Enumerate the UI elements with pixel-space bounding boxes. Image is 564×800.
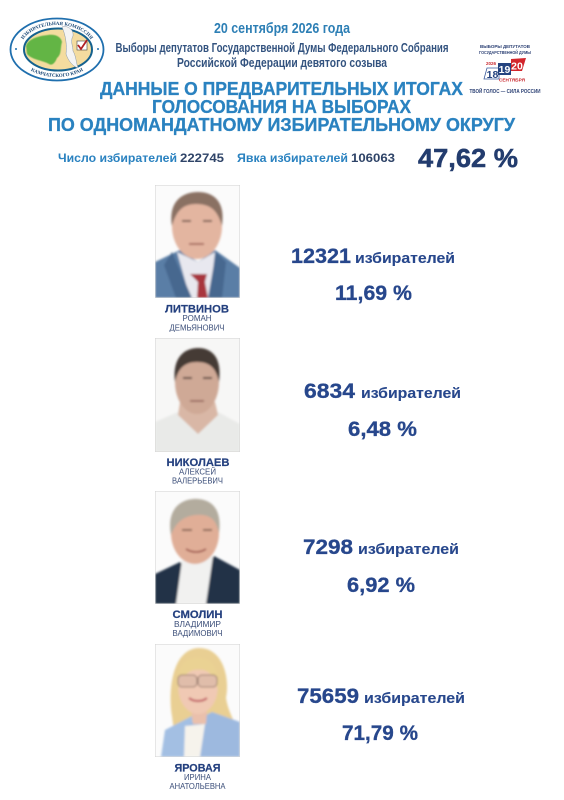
- result: Litvinov: избирателей: [355, 250, 455, 267]
- turnout statistics: [58, 143, 518, 173]
- title: [48, 79, 516, 135]
- turnout statistics: 222745: [180, 151, 224, 165]
- logo: election commission of Kamchatka: КАМЧАТСКОГО КРАЯ: [30, 68, 84, 77]
- heading: date and election name: 20 сентября 2026 года: [214, 20, 351, 37]
- result: Nikolaev: 6,48 %: [348, 418, 417, 441]
- result: Smolin: [303, 536, 459, 597]
- candidate name: Nikolaev: НИКОЛАЕВ: [166, 457, 230, 469]
- logo: elections 18-19-20 September: 2026: [486, 61, 497, 66]
- turnout statistics: 106063: [351, 151, 395, 165]
- result: Smolin: 6,92 %: [347, 574, 415, 597]
- logo: elections 18-19-20 September: 20: [511, 60, 523, 72]
- logo: elections 18-19-20 September: ТВОЙ ГОЛОС — СИЛА РОССИИ: [470, 87, 541, 95]
- result: Yarovaya: 71,79 %: [342, 722, 418, 745]
- result: Yarovaya: 75659: [297, 685, 359, 708]
- candidate name: Nikolaev: [166, 457, 230, 486]
- logo: elections 18-19-20 September: СЕНТЯБРЯ: [499, 78, 525, 82]
- turnout statistics: Число избирателей: [58, 151, 177, 165]
- heading: date and election name: Российской Федерации девятого созыва: [177, 55, 388, 70]
- result: Nikolaev: избирателей: [361, 385, 461, 402]
- candidate name: Litvinov: РОМАН: [182, 313, 212, 323]
- candidate name: Smolin: [172, 609, 223, 638]
- result: Litvinov: 11,69 %: [335, 282, 412, 305]
- candidate name: Smolin: СМОЛИН: [172, 609, 223, 621]
- logo: elections 18-19-20 September: [470, 44, 541, 95]
- turnout statistics: Явка избирателей: [237, 151, 348, 165]
- logo: election commission of Kamchatka: [10, 18, 104, 82]
- heading: date and election name: [116, 20, 448, 70]
- result: Yarovaya: избирателей: [364, 690, 465, 707]
- candidate name: Nikolaev: ВАЛЕРЬЕВИЧ: [172, 476, 223, 486]
- result: Nikolaev: 6834: [304, 380, 355, 403]
- turnout statistics: 47,62 %: [418, 143, 518, 173]
- logo: elections 18-19-20 September: 18: [487, 69, 498, 81]
- result: Litvinov: 12321: [291, 245, 351, 268]
- title: ДАННЫЕ О ПРЕДВАРИТЕЛЬНЫХ ИТОГАХ: [100, 79, 463, 99]
- title: ПО ОДНОМАНДАТНОМУ ИЗБИРАТЕЛЬНОМУ ОКРУГУ: [48, 115, 516, 135]
- logo: elections 18-19-20 September: ГОСУДАРСТВЕННОЙ ДУМЫ: [479, 48, 531, 55]
- candidate name: Litvinov: ДЕМЬЯНОВИЧ: [170, 322, 224, 332]
- logo: election commission of Kamchatka: ИЗБИРАТЕЛЬНАЯ КОМИССИЯ: [20, 22, 94, 40]
- logo: elections 18-19-20 September: 19: [499, 64, 510, 76]
- candidate photo: Nikolaev: [155, 338, 240, 452]
- candidate name: Smolin: ВЛАДИМИР: [174, 619, 221, 629]
- title: ГОЛОСОВАНИЯ НА ВЫБОРАХ: [152, 97, 411, 117]
- candidate name: Yarovaya: [170, 762, 226, 791]
- candidate name: Nikolaev: АЛЕКСЕЙ: [179, 466, 216, 476]
- result: Nikolaev: [304, 380, 461, 441]
- candidate name: Yarovaya: АНАТОЛЬЕВНА: [170, 781, 226, 791]
- candidate name: Smolin: ВАДИМОВИЧ: [172, 628, 222, 638]
- result: Yarovaya: [297, 685, 465, 745]
- result: Litvinov: [291, 245, 455, 305]
- result: Smolin: избирателей: [358, 541, 459, 558]
- result: Smolin: 7298: [303, 536, 353, 559]
- candidate photo: Litvinov: [155, 185, 240, 298]
- candidate photo: Smolin: [155, 491, 240, 604]
- candidate name: Yarovaya: ЯРОВАЯ: [174, 762, 221, 774]
- candidate name: Yarovaya: ИРИНА: [184, 772, 211, 782]
- logo: elections 18-19-20 September: ВЫБОРЫ ДЕПУТАТОВ: [480, 44, 531, 49]
- candidate name: Litvinov: ЛИТВИНОВ: [165, 304, 229, 316]
- candidate photo: Yarovaya: [155, 644, 240, 757]
- candidate name: Litvinov: [165, 304, 229, 332]
- heading: date and election name: Выборы депутатов Государственной Думы Федерального Собрания: [116, 40, 448, 55]
